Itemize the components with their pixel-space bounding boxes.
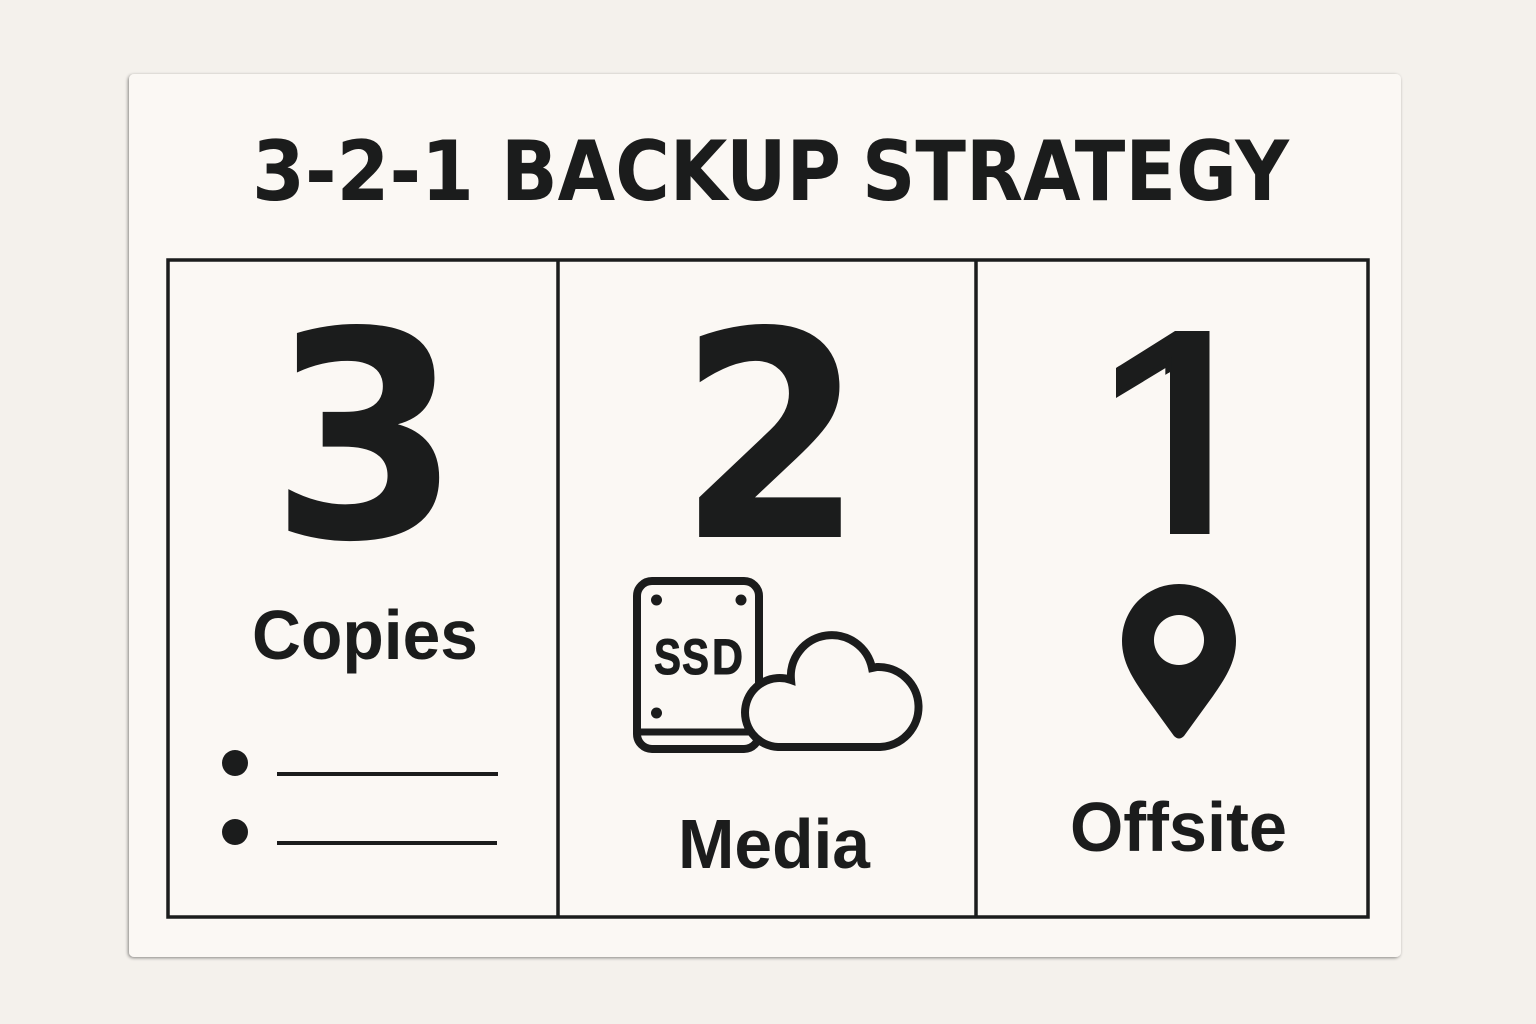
bullet list placeholder [222, 750, 498, 845]
icon: SSD drive [637, 581, 759, 749]
title [252, 123, 1290, 220]
number 1: 1 [1095, 261, 1270, 602]
number 3: 3 [270, 271, 461, 605]
icon: cloud [745, 635, 919, 747]
title: 3-2-1 [252, 123, 474, 220]
icon: SSD drive: S [682, 629, 709, 685]
panel: copies [222, 271, 498, 845]
table frame with three columns [168, 260, 1368, 917]
icon: SSD drive: D [712, 629, 743, 685]
label: Media: Media [678, 805, 871, 883]
label: Offsite: Offsite [1070, 788, 1287, 866]
number 2: 2 [678, 271, 864, 605]
icon: location pin [1122, 584, 1236, 738]
title: BACKUP [501, 123, 841, 220]
icon: SSD drive: S [654, 629, 681, 685]
panel: card [129, 74, 1401, 957]
panel: offsite [1072, 331, 1285, 852]
label: Copies: Copies [252, 596, 478, 674]
title: STRATEGY [862, 123, 1290, 220]
panel: media [637, 271, 919, 883]
